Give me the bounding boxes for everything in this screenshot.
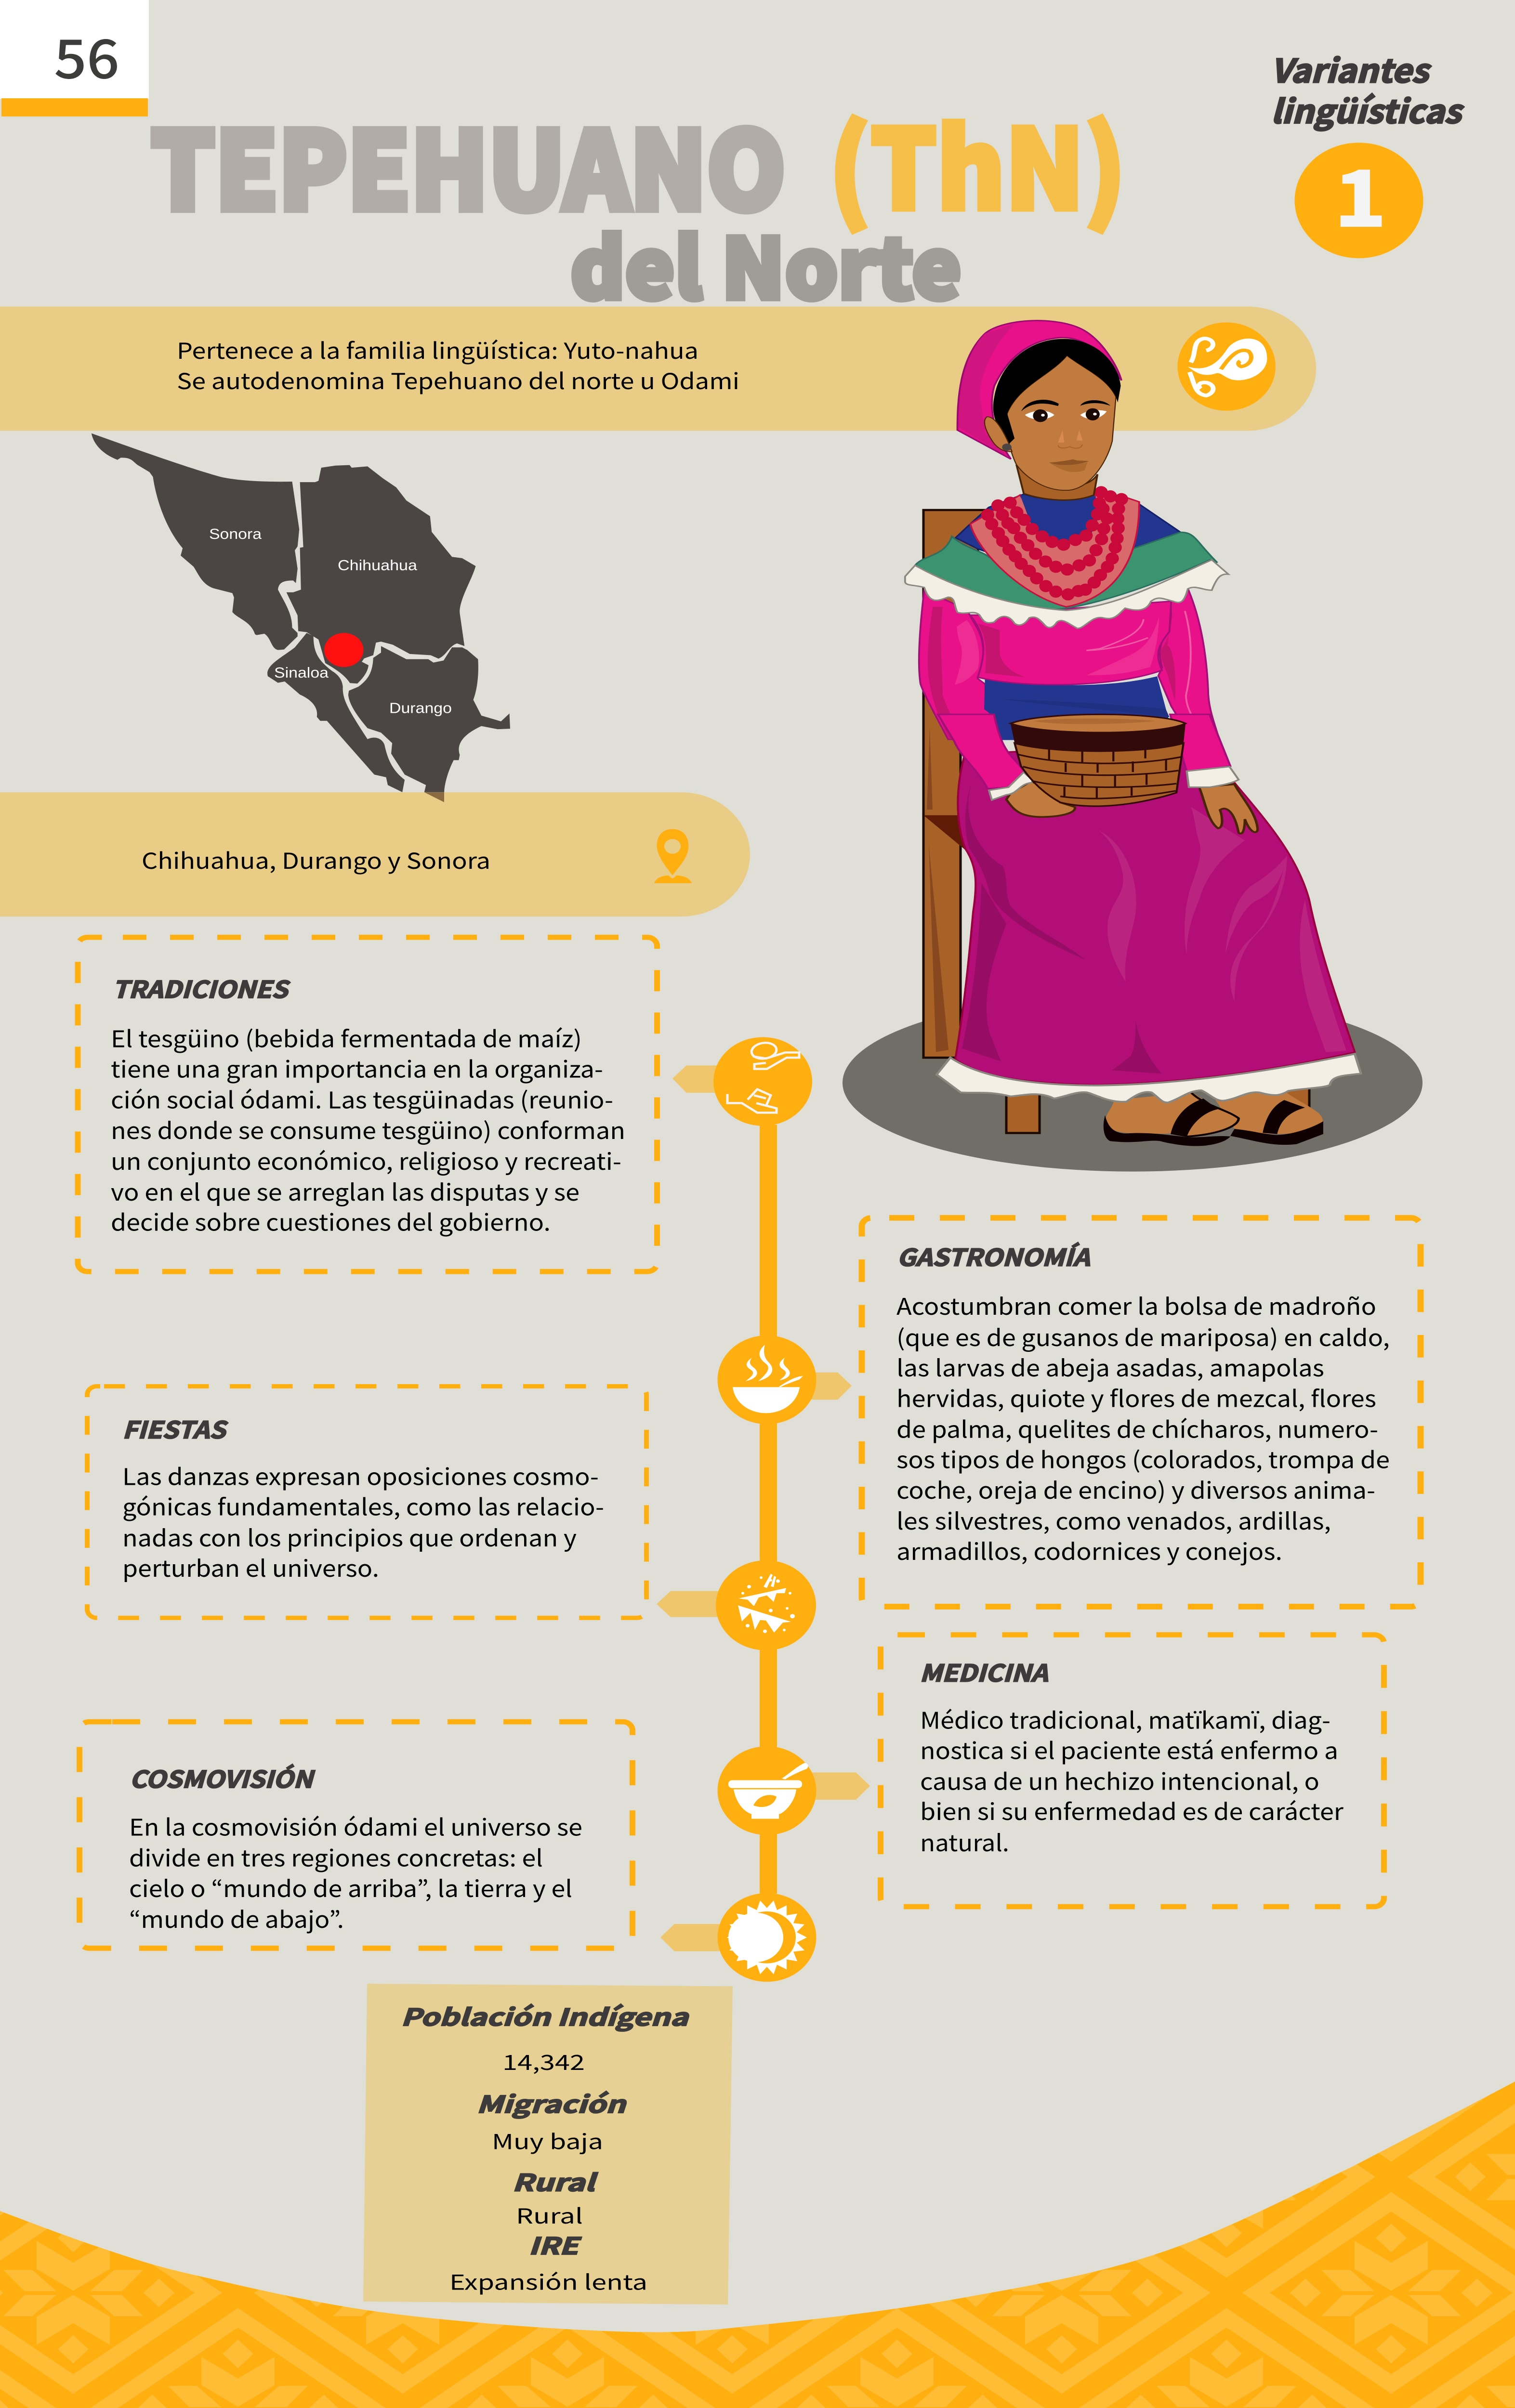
map labels <box>209 526 452 716</box>
variant count badge <box>1295 135 1423 258</box>
map labels: Chihuahua <box>338 557 417 574</box>
text: medicina: bien si su enfermedad es de carácter <box>920 1793 1344 1827</box>
icon: hands exchanging <box>713 1037 812 1126</box>
panel: fiestas <box>87 1386 646 1618</box>
lace collar <box>905 560 1228 628</box>
icon: speech scroll <box>1177 322 1276 411</box>
band: language family: Se autodenomina Tepehuano del norte u Odami <box>177 364 739 395</box>
page number tab <box>0 0 149 117</box>
text: medicina: Médico tradicional, matïkamï, diag- <box>920 1702 1331 1736</box>
timeline spine <box>760 1125 777 1894</box>
bead necklace <box>981 486 1128 601</box>
text: cosmovisión <box>129 1809 582 1935</box>
map labels: Sinaloa <box>274 664 329 681</box>
text: tradiciones: tiene una gran importancia en la organiza- <box>111 1051 603 1085</box>
icon: steaming bowl <box>718 1335 816 1424</box>
heading: gastronomía: GASTRONOMÍA <box>897 1239 1090 1273</box>
green collar <box>915 532 1217 610</box>
variantes lingüísticas label <box>1271 45 1464 132</box>
heading: medicina: MEDICINA <box>920 1654 1048 1688</box>
ground shadow <box>843 994 1423 1172</box>
feet and sandals <box>1104 1089 1323 1146</box>
text: tradiciones <box>111 1021 625 1238</box>
icon: location pin <box>654 829 692 883</box>
text: tradiciones: decide sobre cuestiones del gobierno. <box>111 1204 551 1238</box>
text: cosmovisión: cielo o “mundo de arriba”, la tierra y el <box>129 1871 572 1904</box>
band: language family: Pertenece a la familia lingüística: Yuto-nahua <box>177 333 698 365</box>
text: gastronomía: (que es de gusanos de mariposa) en caldo, <box>896 1320 1390 1353</box>
stat: migración: Muy baja <box>492 2125 603 2156</box>
text: medicina: natural. <box>920 1825 1009 1858</box>
heading: cosmovisión: COSMOVISIÓN <box>130 1760 316 1794</box>
text: fiestas: nadas con los principios que ordenan y <box>122 1520 577 1553</box>
text: gastronomía: hervidas, quiote y flores de mezcal, flores <box>896 1381 1376 1414</box>
text: medicina <box>920 1702 1344 1858</box>
panel: tradiciones <box>78 937 657 1271</box>
map labels: Durango <box>389 700 452 716</box>
nose and lips <box>1058 445 1082 448</box>
text: tradiciones: El tesgüino (bebida fermentada de maíz) <box>111 1021 582 1054</box>
icon: festive bunting <box>716 1560 816 1650</box>
band: location <box>0 792 750 916</box>
stat: población indígena: 14,342 <box>502 2046 585 2076</box>
chair <box>923 510 1309 1133</box>
page number tab: 56 <box>54 16 119 94</box>
text: tradiciones: ción social ódami. Las tesgüinadas (reunio- <box>111 1082 613 1115</box>
hands <box>1006 781 1075 817</box>
stat: población indígena: Población Indígena <box>401 1998 689 2032</box>
variant count badge: 1 <box>1334 135 1387 249</box>
map shapes <box>92 433 510 792</box>
panel: demographic stats <box>363 1984 733 2304</box>
basket and hands <box>938 714 1258 834</box>
text: gastronomía: coche, oreja de encino) y diversos anima- <box>896 1472 1375 1505</box>
neck <box>1016 465 1097 500</box>
state map <box>92 433 510 792</box>
blouse <box>905 321 1228 739</box>
map labels: Sonora <box>209 526 262 542</box>
title: TEPEHUANO <box>151 85 786 240</box>
hair <box>993 339 1121 444</box>
seated woman illustration <box>843 321 1423 1172</box>
title: (ThN) <box>829 81 1126 241</box>
icon: sun and moon <box>718 1893 816 1982</box>
icon: mortar and pestle <box>718 1746 816 1835</box>
stat: IRE: Expansión lenta <box>449 2266 647 2296</box>
stat: migración: Migración <box>476 2085 627 2120</box>
text: gastronomía: las larvas de abeja asadas, amapolas <box>896 1350 1324 1383</box>
face <box>1007 355 1116 490</box>
timeline <box>657 1037 870 1982</box>
text: fiestas: gónicas fundamentales, como las relacio- <box>122 1489 604 1522</box>
text: medicina: causa de un hechizo intencional, o <box>920 1763 1319 1796</box>
stat: IRE: IRE <box>528 2227 582 2261</box>
variantes lingüísticas label: Variantes <box>1271 45 1431 92</box>
stat: rural <box>512 2164 598 2230</box>
eyes and brows <box>1021 400 1110 472</box>
stat: IRE <box>449 2227 647 2296</box>
text: gastronomía: sos tipos de hongos (colorados, trompa de <box>896 1442 1390 1475</box>
text: gastronomía: de palma, quelites de chícharos, numero- <box>896 1412 1378 1445</box>
basket <box>1014 743 1184 806</box>
panel: medicina <box>881 1635 1384 1907</box>
text: cosmovisión: divide en tres regiones concretas: el <box>129 1840 543 1873</box>
stat: rural: Rural <box>512 2164 598 2198</box>
variantes lingüísticas label: lingüísticas <box>1271 86 1464 132</box>
ear and earring <box>985 417 1012 452</box>
skirt and hem <box>936 745 1361 1146</box>
heading: fiestas: FIESTAS <box>122 1411 228 1445</box>
title <box>151 81 1126 323</box>
text: cosmovisión: En la cosmovisión ódami el universo se <box>129 1809 582 1843</box>
connector arrows <box>657 1065 870 1951</box>
text: gastronomía: armadillos, codornices y conejos. <box>896 1533 1282 1567</box>
cuffs <box>989 767 1238 800</box>
text: gastronomía <box>896 1288 1390 1567</box>
headscarf <box>957 321 1121 459</box>
panel: cosmovisión <box>79 1722 632 1948</box>
text: fiestas <box>122 1459 604 1584</box>
blue neckline <box>956 494 1181 579</box>
heading: tradiciones: TRADICIONES <box>112 970 290 1005</box>
band: language family <box>0 306 1316 431</box>
text: medicina: nostica si el paciente está enfermo a <box>920 1733 1338 1766</box>
text: fiestas: perturban el universo. <box>122 1550 379 1584</box>
title: del Norte <box>570 202 962 323</box>
text: fiestas: Las danzas expresan oposiciones cosmo- <box>122 1459 599 1492</box>
text: gastronomía: les silvestres, como venados, ardillas, <box>896 1503 1331 1536</box>
text: tradiciones: vo en el que se arreglan las disputas y se <box>111 1174 580 1207</box>
text: gastronomía: Acostumbran comer la bolsa de madroño <box>896 1288 1376 1322</box>
band: location: Chihuahua, Durango y Sonora <box>142 843 490 875</box>
text: tradiciones: un conjunto económico, religioso y recreati- <box>111 1143 621 1177</box>
sleeves ends <box>938 714 1024 789</box>
stat: migración <box>476 2085 627 2156</box>
stat: población indígena <box>401 1998 689 2076</box>
stat: rural: Rural <box>516 2200 583 2230</box>
text: cosmovisión: “mundo de abajo”. <box>129 1901 344 1935</box>
text: tradiciones: nes donde se consume tesgüino) conforman <box>111 1112 625 1146</box>
pink bib <box>970 494 1139 607</box>
panel: gastronomía <box>862 1218 1421 1607</box>
